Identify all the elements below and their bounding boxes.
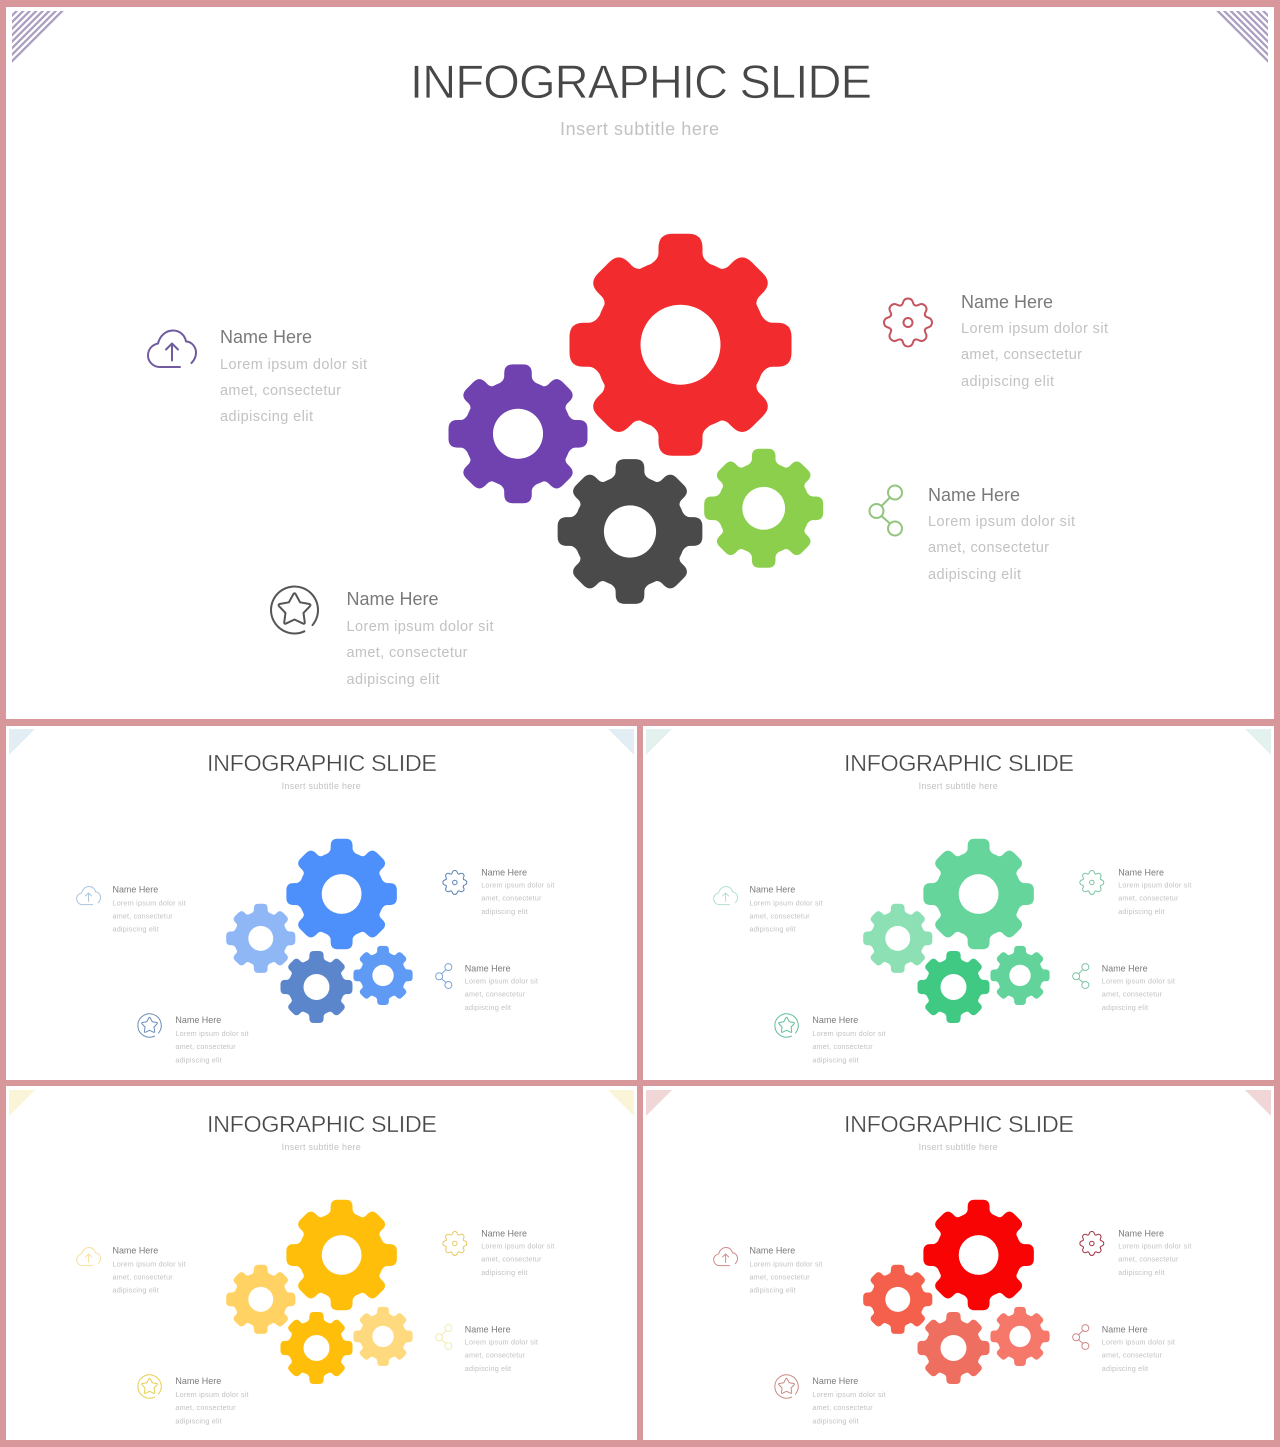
text block: upper right: Name Here — [481, 867, 527, 877]
icon: cloud upload — [714, 886, 738, 905]
text block: lower right: Lorem ipsum dolor sit — [465, 1338, 538, 1347]
gear: light green — [863, 904, 932, 973]
text block: lower right: amet, consectetur — [465, 1351, 526, 1360]
corner decoration: left — [9, 729, 35, 755]
text block: left: Name Here — [112, 885, 158, 895]
icon: share — [1073, 1325, 1089, 1349]
text block: lower right: amet, consectetur — [1102, 990, 1163, 999]
gear: mid green — [990, 946, 1050, 1005]
text block: left: amet, consectetur — [749, 912, 810, 921]
text block: bottom: amet, consectetur — [812, 1403, 873, 1412]
text block: left: adipiscing elit — [749, 1285, 796, 1294]
icon: cloud upload — [77, 1247, 101, 1266]
text block: lower right: adipiscing elit — [928, 567, 1021, 583]
text block: bottom: Name Here — [346, 589, 438, 609]
gear: main red — [923, 1200, 1034, 1310]
corner decoration: right — [1245, 1090, 1271, 1116]
text block: lower right: amet, consectetur — [928, 540, 1049, 556]
title: INFOGRAPHIC SLIDE — [207, 750, 437, 776]
text block: upper right: Lorem ipsum dolor sit — [1118, 1242, 1191, 1251]
subtitle: Insert subtitle here — [560, 119, 719, 139]
icon: share — [870, 486, 902, 536]
subtitle: Insert subtitle here — [919, 781, 998, 791]
text block: bottom: Name Here — [812, 1015, 858, 1025]
corner decoration: left — [646, 1090, 672, 1116]
icon: cloud upload — [714, 1247, 738, 1266]
text block: left: Name Here — [749, 1246, 795, 1256]
icon: star in circle — [775, 1014, 798, 1037]
text block: lower right — [1102, 1324, 1175, 1373]
text block: left: Lorem ipsum dolor sit — [112, 1260, 186, 1269]
gear: dark grey — [558, 459, 702, 604]
text block: bottom: amet, consectetur — [175, 1403, 236, 1412]
text block: bottom: amet, consectetur — [175, 1042, 236, 1051]
text block: left: Lorem ipsum dolor sit — [220, 357, 367, 373]
text block: lower right: adipiscing elit — [1102, 1364, 1148, 1373]
gear: salmon — [917, 1312, 990, 1384]
corner decoration: top right stripes — [1215, 11, 1268, 64]
text block: lower right: Name Here — [928, 485, 1020, 505]
slide content: blue — [77, 750, 554, 1064]
text block: lower right: Lorem ipsum dolor sit — [1102, 1338, 1175, 1347]
text block: lower right — [1102, 963, 1175, 1012]
gear: light amber — [226, 1265, 295, 1334]
text block: upper right: amet, consectetur — [481, 1255, 542, 1264]
text block: upper right: adipiscing elit — [481, 1268, 527, 1277]
text block: bottom: Lorem ipsum dolor sit — [812, 1390, 886, 1399]
slide content: yellow — [77, 1111, 554, 1425]
text block: bottom — [346, 589, 494, 688]
text block: bottom: adipiscing elit — [175, 1416, 222, 1425]
text block: upper right: Name Here — [961, 292, 1053, 312]
text block: left — [749, 885, 823, 933]
text block: left: adipiscing elit — [112, 924, 159, 933]
text block: lower right: Name Here — [1102, 963, 1148, 973]
text block: left: adipiscing elit — [220, 409, 313, 425]
text block: upper right: adipiscing elit — [961, 374, 1054, 390]
text block: lower right: Name Here — [465, 963, 511, 973]
text block: upper right: adipiscing elit — [1118, 1268, 1164, 1277]
gear: steel blue — [280, 951, 353, 1023]
text block: bottom: adipiscing elit — [812, 1416, 859, 1425]
text block: bottom: Name Here — [175, 1376, 221, 1386]
text block: bottom: adipiscing elit — [812, 1055, 859, 1064]
text block: upper right — [1118, 1228, 1191, 1277]
text block: lower right: Name Here — [465, 1324, 511, 1334]
text block: lower right — [465, 963, 538, 1012]
text block: upper right: amet, consectetur — [1118, 1255, 1179, 1264]
text block: upper right: adipiscing elit — [481, 907, 527, 916]
text block: bottom: amet, consectetur — [346, 645, 468, 661]
icon: gear outline — [443, 1232, 467, 1255]
text block: left: Name Here — [112, 1246, 158, 1256]
text block: bottom — [812, 1376, 886, 1425]
text block: upper right — [961, 292, 1108, 390]
text block: left: Lorem ipsum dolor sit — [749, 1260, 823, 1269]
corner decoration: top left stripes — [12, 11, 65, 64]
text block: left: adipiscing elit — [112, 1285, 159, 1294]
subtitle: Insert subtitle here — [282, 1142, 361, 1152]
text block: lower right: adipiscing elit — [1102, 1003, 1148, 1012]
text block: upper right: Name Here — [1118, 867, 1164, 877]
text block: upper right: Lorem ipsum dolor sit — [481, 1242, 554, 1251]
panel: red variant — [643, 1086, 1274, 1440]
text block: left — [749, 1246, 823, 1294]
icon: star in circle — [138, 1014, 161, 1037]
text block: lower right: Lorem ipsum dolor sit — [928, 514, 1075, 530]
panel: yellow variant — [6, 1086, 637, 1440]
gear: main blue — [286, 839, 397, 949]
text block: lower right: adipiscing elit — [465, 1003, 511, 1012]
text block: left — [112, 1246, 186, 1294]
title: INFOGRAPHIC SLIDE — [844, 750, 1074, 776]
text block: bottom — [175, 1015, 249, 1064]
title: INFOGRAPHIC SLIDE — [410, 55, 872, 108]
text block: upper right: Name Here — [1118, 1228, 1164, 1238]
icon: share — [436, 964, 452, 988]
text block: bottom: Lorem ipsum dolor sit — [346, 619, 494, 635]
gear: light blue — [226, 904, 295, 973]
text block: bottom: Lorem ipsum dolor sit — [812, 1029, 886, 1038]
corner decoration: right — [608, 1090, 634, 1116]
gear: main green — [923, 839, 1034, 949]
text block: bottom: adipiscing elit — [175, 1055, 222, 1064]
text block: left: Lorem ipsum dolor sit — [112, 899, 186, 908]
text block: bottom: Lorem ipsum dolor sit — [175, 1029, 249, 1038]
icon: gear outline — [1080, 871, 1104, 894]
text block: left: amet, consectetur — [749, 1273, 810, 1282]
text block: bottom — [812, 1015, 886, 1064]
text block: bottom: adipiscing elit — [346, 672, 440, 688]
text block: lower right: amet, consectetur — [1102, 1351, 1163, 1360]
text block: bottom: amet, consectetur — [812, 1042, 873, 1051]
text block: left: Name Here — [749, 885, 795, 895]
corner decoration: left — [646, 729, 672, 755]
text block: left: amet, consectetur — [112, 1273, 173, 1282]
icon: gear outline — [884, 298, 932, 346]
text block: upper right — [481, 1228, 554, 1277]
text block: upper right — [481, 867, 554, 916]
text block: bottom: Name Here — [175, 1015, 221, 1025]
text block: lower right: amet, consectetur — [465, 990, 526, 999]
text block: lower right — [465, 1324, 538, 1373]
corner decoration: right — [608, 729, 634, 755]
icon: share — [436, 1325, 452, 1349]
gear: pale amber — [353, 1307, 413, 1366]
text block: left — [220, 327, 367, 425]
text block: upper right: adipiscing elit — [1118, 907, 1164, 916]
text block: upper right: amet, consectetur — [961, 347, 1082, 363]
icon: share — [1073, 964, 1089, 988]
icon: star in circle — [271, 586, 318, 633]
text block: lower right: Lorem ipsum dolor sit — [465, 977, 538, 986]
slide content: red — [714, 1111, 1191, 1425]
panel: main slide — [6, 7, 1274, 719]
text block: left: amet, consectetur — [220, 383, 341, 399]
gear: green — [704, 449, 823, 568]
text block: upper right: Name Here — [481, 1228, 527, 1238]
gear: mid blue — [353, 946, 413, 1005]
text block: left: Lorem ipsum dolor sit — [749, 899, 823, 908]
text block: upper right: Lorem ipsum dolor sit — [481, 881, 554, 890]
panel: green variant — [643, 726, 1274, 1080]
text block: upper right: amet, consectetur — [481, 894, 542, 903]
text block: bottom: Name Here — [812, 1376, 858, 1386]
slide content: green — [714, 750, 1191, 1064]
gear: purple — [449, 364, 587, 503]
text block: upper right: amet, consectetur — [1118, 894, 1179, 903]
title: INFOGRAPHIC SLIDE — [207, 1111, 437, 1137]
icon: cloud upload — [77, 886, 101, 905]
text block: left — [112, 885, 186, 933]
text block: upper right — [1118, 867, 1191, 916]
icon: cloud upload — [148, 330, 196, 367]
text block: left: adipiscing elit — [749, 924, 796, 933]
text block: upper right: Lorem ipsum dolor sit — [961, 321, 1108, 337]
gear: orange red — [863, 1265, 932, 1334]
text block: lower right: adipiscing elit — [465, 1364, 511, 1373]
gear: main amber — [286, 1200, 397, 1310]
text block: lower right — [928, 485, 1075, 583]
gear: deep green — [917, 951, 990, 1023]
subtitle: Insert subtitle here — [282, 781, 361, 791]
text block: bottom — [175, 1376, 249, 1425]
corner decoration: right — [1245, 729, 1271, 755]
gear: red — [570, 234, 792, 456]
text block: lower right: Name Here — [1102, 1324, 1148, 1334]
icon: gear outline — [443, 871, 467, 894]
icon: star in circle — [775, 1375, 798, 1398]
gear: amber — [280, 1312, 353, 1384]
panel: blue variant — [6, 726, 637, 1080]
gear: light salmon — [990, 1307, 1050, 1366]
subtitle: Insert subtitle here — [919, 1142, 998, 1152]
corner decoration: left — [9, 1090, 35, 1116]
icon: gear outline — [1080, 1232, 1104, 1255]
title: INFOGRAPHIC SLIDE — [844, 1111, 1074, 1137]
text block: left: amet, consectetur — [112, 912, 173, 921]
icon: star in circle — [138, 1375, 161, 1398]
text block: left: Name Here — [220, 327, 312, 347]
text block: lower right: Lorem ipsum dolor sit — [1102, 977, 1175, 986]
text block: bottom: Lorem ipsum dolor sit — [175, 1390, 249, 1399]
text block: upper right: Lorem ipsum dolor sit — [1118, 881, 1191, 890]
